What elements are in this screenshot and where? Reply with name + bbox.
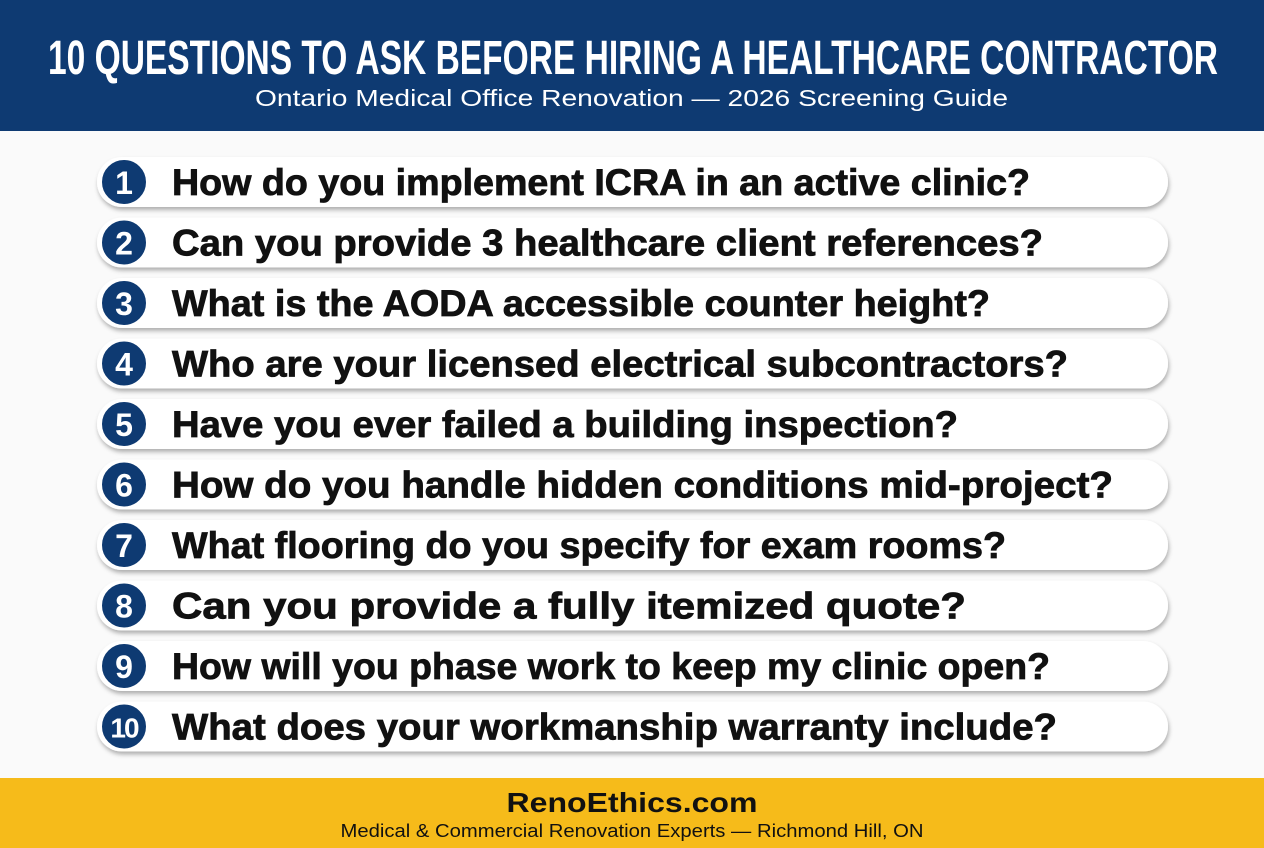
question 1 [97, 157, 1168, 207]
question 1: 1 [115, 165, 133, 201]
question 6 [97, 460, 1168, 510]
header [0, 0, 1264, 131]
footer brand: RenoEthics.com [506, 787, 758, 818]
question 9: How will you phase work to keep my clinic open? [172, 646, 1050, 687]
footer [0, 778, 1264, 848]
question 1: How do you implement ICRA in an active clinic? [172, 162, 1030, 203]
question 10: What does your workmanship warranty include? [172, 706, 1057, 748]
question 2: Can you provide 3 healthcare client references? [172, 222, 1043, 264]
question 6: How do you handle hidden conditions mid-project? [172, 464, 1113, 506]
question 2: 2 [115, 226, 133, 262]
question 4: 4 [115, 346, 133, 382]
question 8: 8 [115, 588, 133, 624]
question 7: What flooring do you specify for exam rooms? [172, 525, 1006, 566]
question 10 [97, 702, 1168, 752]
question 4: Who are your licensed electrical subcontractors? [172, 344, 1068, 384]
question list [97, 157, 1168, 752]
question 5: 5 [115, 407, 133, 443]
question 8: Can you provide a fully itemized quote? [172, 586, 966, 626]
question 2 [97, 218, 1168, 268]
question 3: 3 [115, 286, 133, 322]
question 7 [97, 520, 1168, 570]
question 10: 10 [110, 712, 139, 744]
question 6: 6 [115, 468, 133, 504]
question 7: 7 [115, 528, 133, 564]
question 3: What is the AODA accessible counter height? [172, 283, 990, 324]
question 4 [97, 338, 1168, 388]
question 9 [97, 641, 1168, 691]
footer tagline: Medical & Commercial Renovation Experts — Richmond Hill, ON [340, 821, 924, 841]
question 9: 9 [115, 649, 133, 685]
subtitle: Ontario Medical Office Renovation — 2026 Screening Guide [255, 85, 1008, 111]
question 5 [97, 399, 1168, 449]
question 8 [97, 580, 1168, 630]
question 3 [97, 278, 1168, 328]
question 5: Have you ever failed a building inspection? [172, 404, 958, 445]
